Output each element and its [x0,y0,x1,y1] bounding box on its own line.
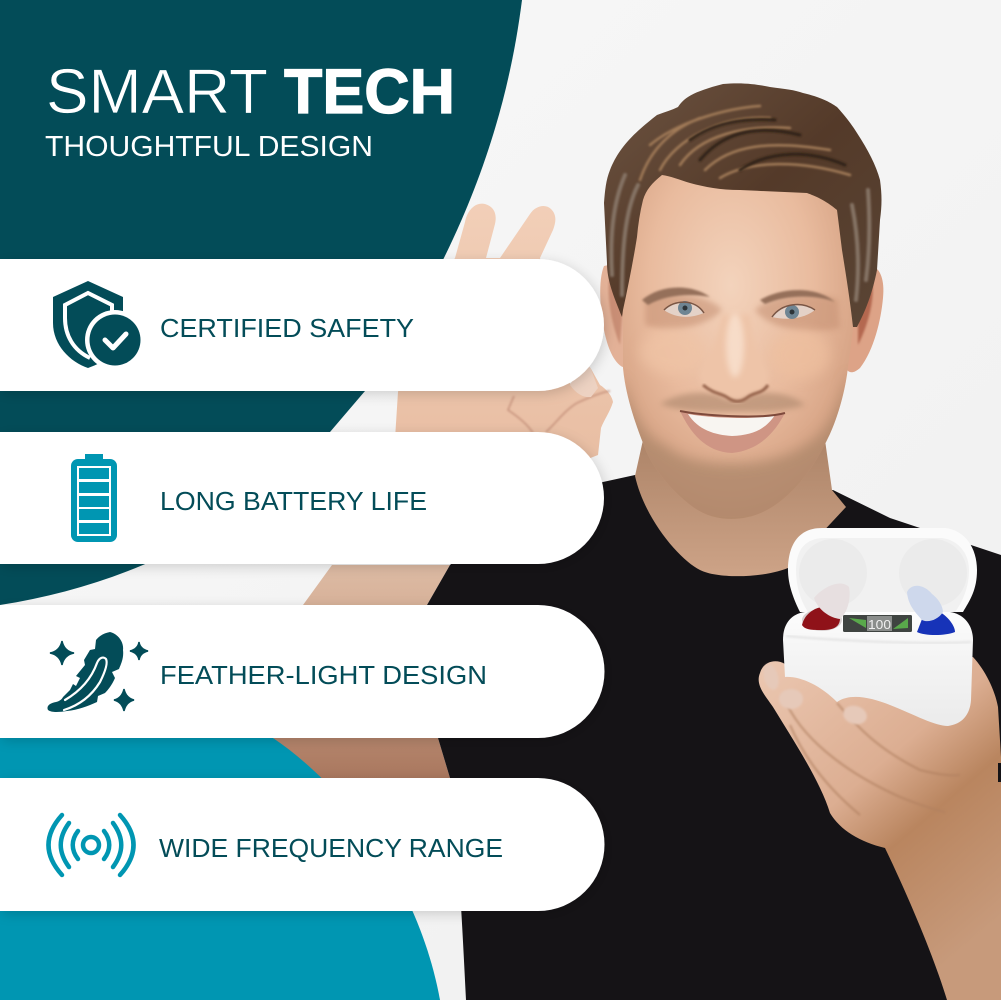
title: TECH [284,57,455,127]
eyes [664,301,815,319]
dark teal curved panel [0,0,522,605]
label: FEATHER-LIGHT DESIGN [160,660,487,690]
case lid [788,528,977,612]
greying sides [611,175,869,300]
lid inner recess [796,538,969,612]
neck [635,440,846,576]
eye socket shadow [645,295,840,331]
light teal curved panel [0,738,440,1000]
left ear [600,262,630,368]
face shading and stubble [620,295,850,530]
LED display [843,615,912,632]
card background [0,605,605,738]
icon: shield with check [53,281,145,370]
person photo illustration [273,83,1001,1000]
label: CERTIFIED SAFETY [160,313,414,343]
left arm [273,565,450,790]
case body [783,612,973,726]
case rim highlight [786,636,971,643]
card background [0,778,605,911]
nose [700,313,768,401]
eyebrows [642,288,835,305]
card background [0,259,604,391]
right ear [845,266,883,372]
finger creases [785,700,960,815]
label: LONG BATTERY LIFE [160,486,427,516]
display left bars [849,618,866,628]
card: wide frequency range [0,778,605,911]
red earbud [802,583,850,630]
title [46,57,455,127]
subtitle: THOUGHTFUL DESIGN [45,131,373,163]
hair highlights [640,106,850,180]
holding hand and forearm [759,657,1001,1000]
card: certified safety [0,259,604,391]
raised hand [393,204,613,470]
left lid cup [799,539,867,607]
card background [0,432,604,564]
display readout: 100 [868,617,891,632]
blue earbud [907,586,955,635]
hair dark strands [690,120,845,170]
icon: feather with sparkles [47,632,148,712]
moustache shadow [660,393,805,412]
card: feather-light design [0,605,605,738]
title: SMART [46,57,268,127]
sleeve sliver [998,763,1001,782]
card: long battery life [0,432,604,564]
charging case [783,528,977,726]
finger nails [761,663,869,727]
right lid cup [899,539,967,607]
smile [680,411,785,453]
hair [604,83,882,327]
cheek highlight [645,347,658,364]
icon: battery [71,454,117,542]
icon: signal waves [48,815,134,875]
earbud hollows [802,609,842,631]
black t-shirt [427,475,1001,1000]
jaw stubble [626,385,845,519]
face [623,160,853,519]
label: WIDE FREQUENCY RANGE [159,833,503,863]
display centre [867,616,892,631]
display right bars [893,618,908,629]
